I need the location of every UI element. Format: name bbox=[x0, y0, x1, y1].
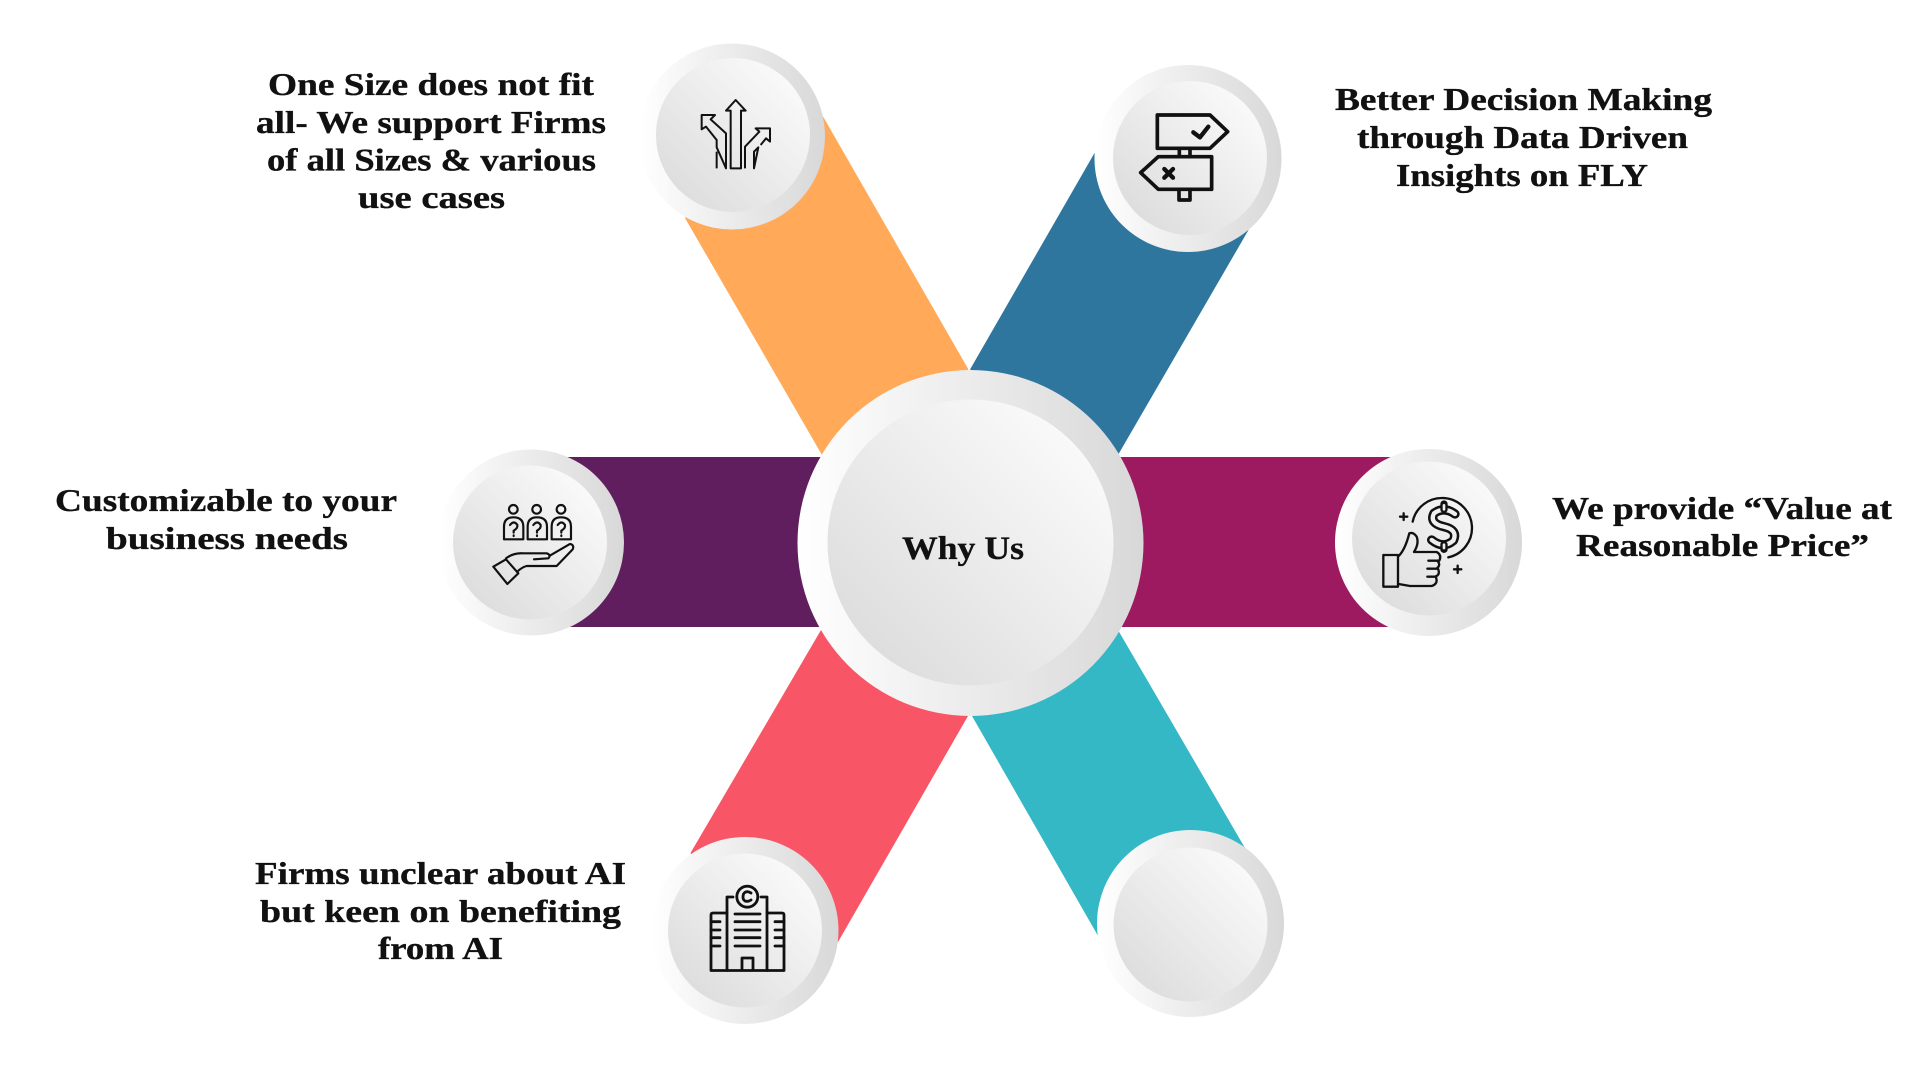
node disc bbox=[453, 466, 607, 620]
band: orange bbox=[685, 113, 968, 455]
text: better decision making: through Data Driven bbox=[1357, 119, 1688, 155]
node: diverging arrows bbox=[639, 44, 825, 230]
text: firms unclear about AI: but keen on benefiting bbox=[260, 893, 621, 929]
node: thumbs up with coin bbox=[1335, 449, 1522, 636]
node disc bbox=[656, 58, 810, 212]
hub outer ring bbox=[798, 370, 1144, 716]
band: magenta bbox=[1100, 457, 1420, 627]
node: people on a hand bbox=[438, 450, 624, 636]
node disc bbox=[1114, 848, 1268, 1002]
node disc bbox=[1113, 81, 1267, 235]
text: firms unclear about AI bbox=[255, 855, 626, 966]
text: customizable bbox=[55, 482, 397, 556]
text: customizable: business needs bbox=[106, 520, 348, 556]
band: teal bbox=[972, 630, 1245, 935]
node ring bbox=[1094, 65, 1282, 252]
text: one size: use cases bbox=[358, 179, 505, 215]
icon: people on a hand bbox=[493, 505, 573, 584]
node disc bbox=[1352, 462, 1506, 616]
node: empty teal circle bbox=[1097, 830, 1284, 1017]
band: blue bbox=[970, 153, 1248, 455]
node ring bbox=[1335, 449, 1522, 636]
text: one size: of all Sizes & various bbox=[267, 142, 596, 178]
hub label: Why Us bbox=[902, 531, 1024, 567]
node: office building bbox=[652, 837, 838, 1024]
text: firms unclear about AI: from AI bbox=[378, 930, 503, 966]
icon: diverging arrows bbox=[702, 100, 770, 168]
icon: signpost bbox=[1141, 115, 1228, 200]
text: value at reasonable price: We provide “Value at bbox=[1552, 490, 1892, 526]
text: firms unclear about AI: Firms unclear about AI bbox=[255, 855, 626, 891]
node ring bbox=[639, 44, 825, 230]
text: value at reasonable price: Reasonable Price” bbox=[1576, 527, 1869, 563]
node: signpost bbox=[1094, 65, 1282, 252]
node disc bbox=[668, 854, 822, 1008]
hub inner disc bbox=[828, 400, 1114, 686]
text: one size: all- We support Firms bbox=[256, 104, 606, 140]
centre hub bbox=[798, 370, 1144, 716]
text: customizable: Customizable to your bbox=[55, 482, 397, 518]
text: value at reasonable price bbox=[1552, 490, 1892, 563]
text: one size: One Size does not fit bbox=[268, 66, 594, 102]
text: better decision making: Insights on FLY bbox=[1396, 157, 1648, 193]
band: red bbox=[690, 630, 968, 942]
text: better decision making bbox=[1335, 81, 1712, 193]
node ring bbox=[438, 450, 624, 636]
icon: thumbs up with coin bbox=[1383, 498, 1472, 587]
node ring bbox=[1097, 830, 1284, 1017]
text: better decision making: Better Decision Making bbox=[1335, 81, 1712, 117]
text: one size bbox=[256, 66, 606, 215]
band: purple bbox=[540, 457, 840, 627]
node ring bbox=[652, 837, 838, 1024]
icon: office building bbox=[711, 886, 784, 970]
